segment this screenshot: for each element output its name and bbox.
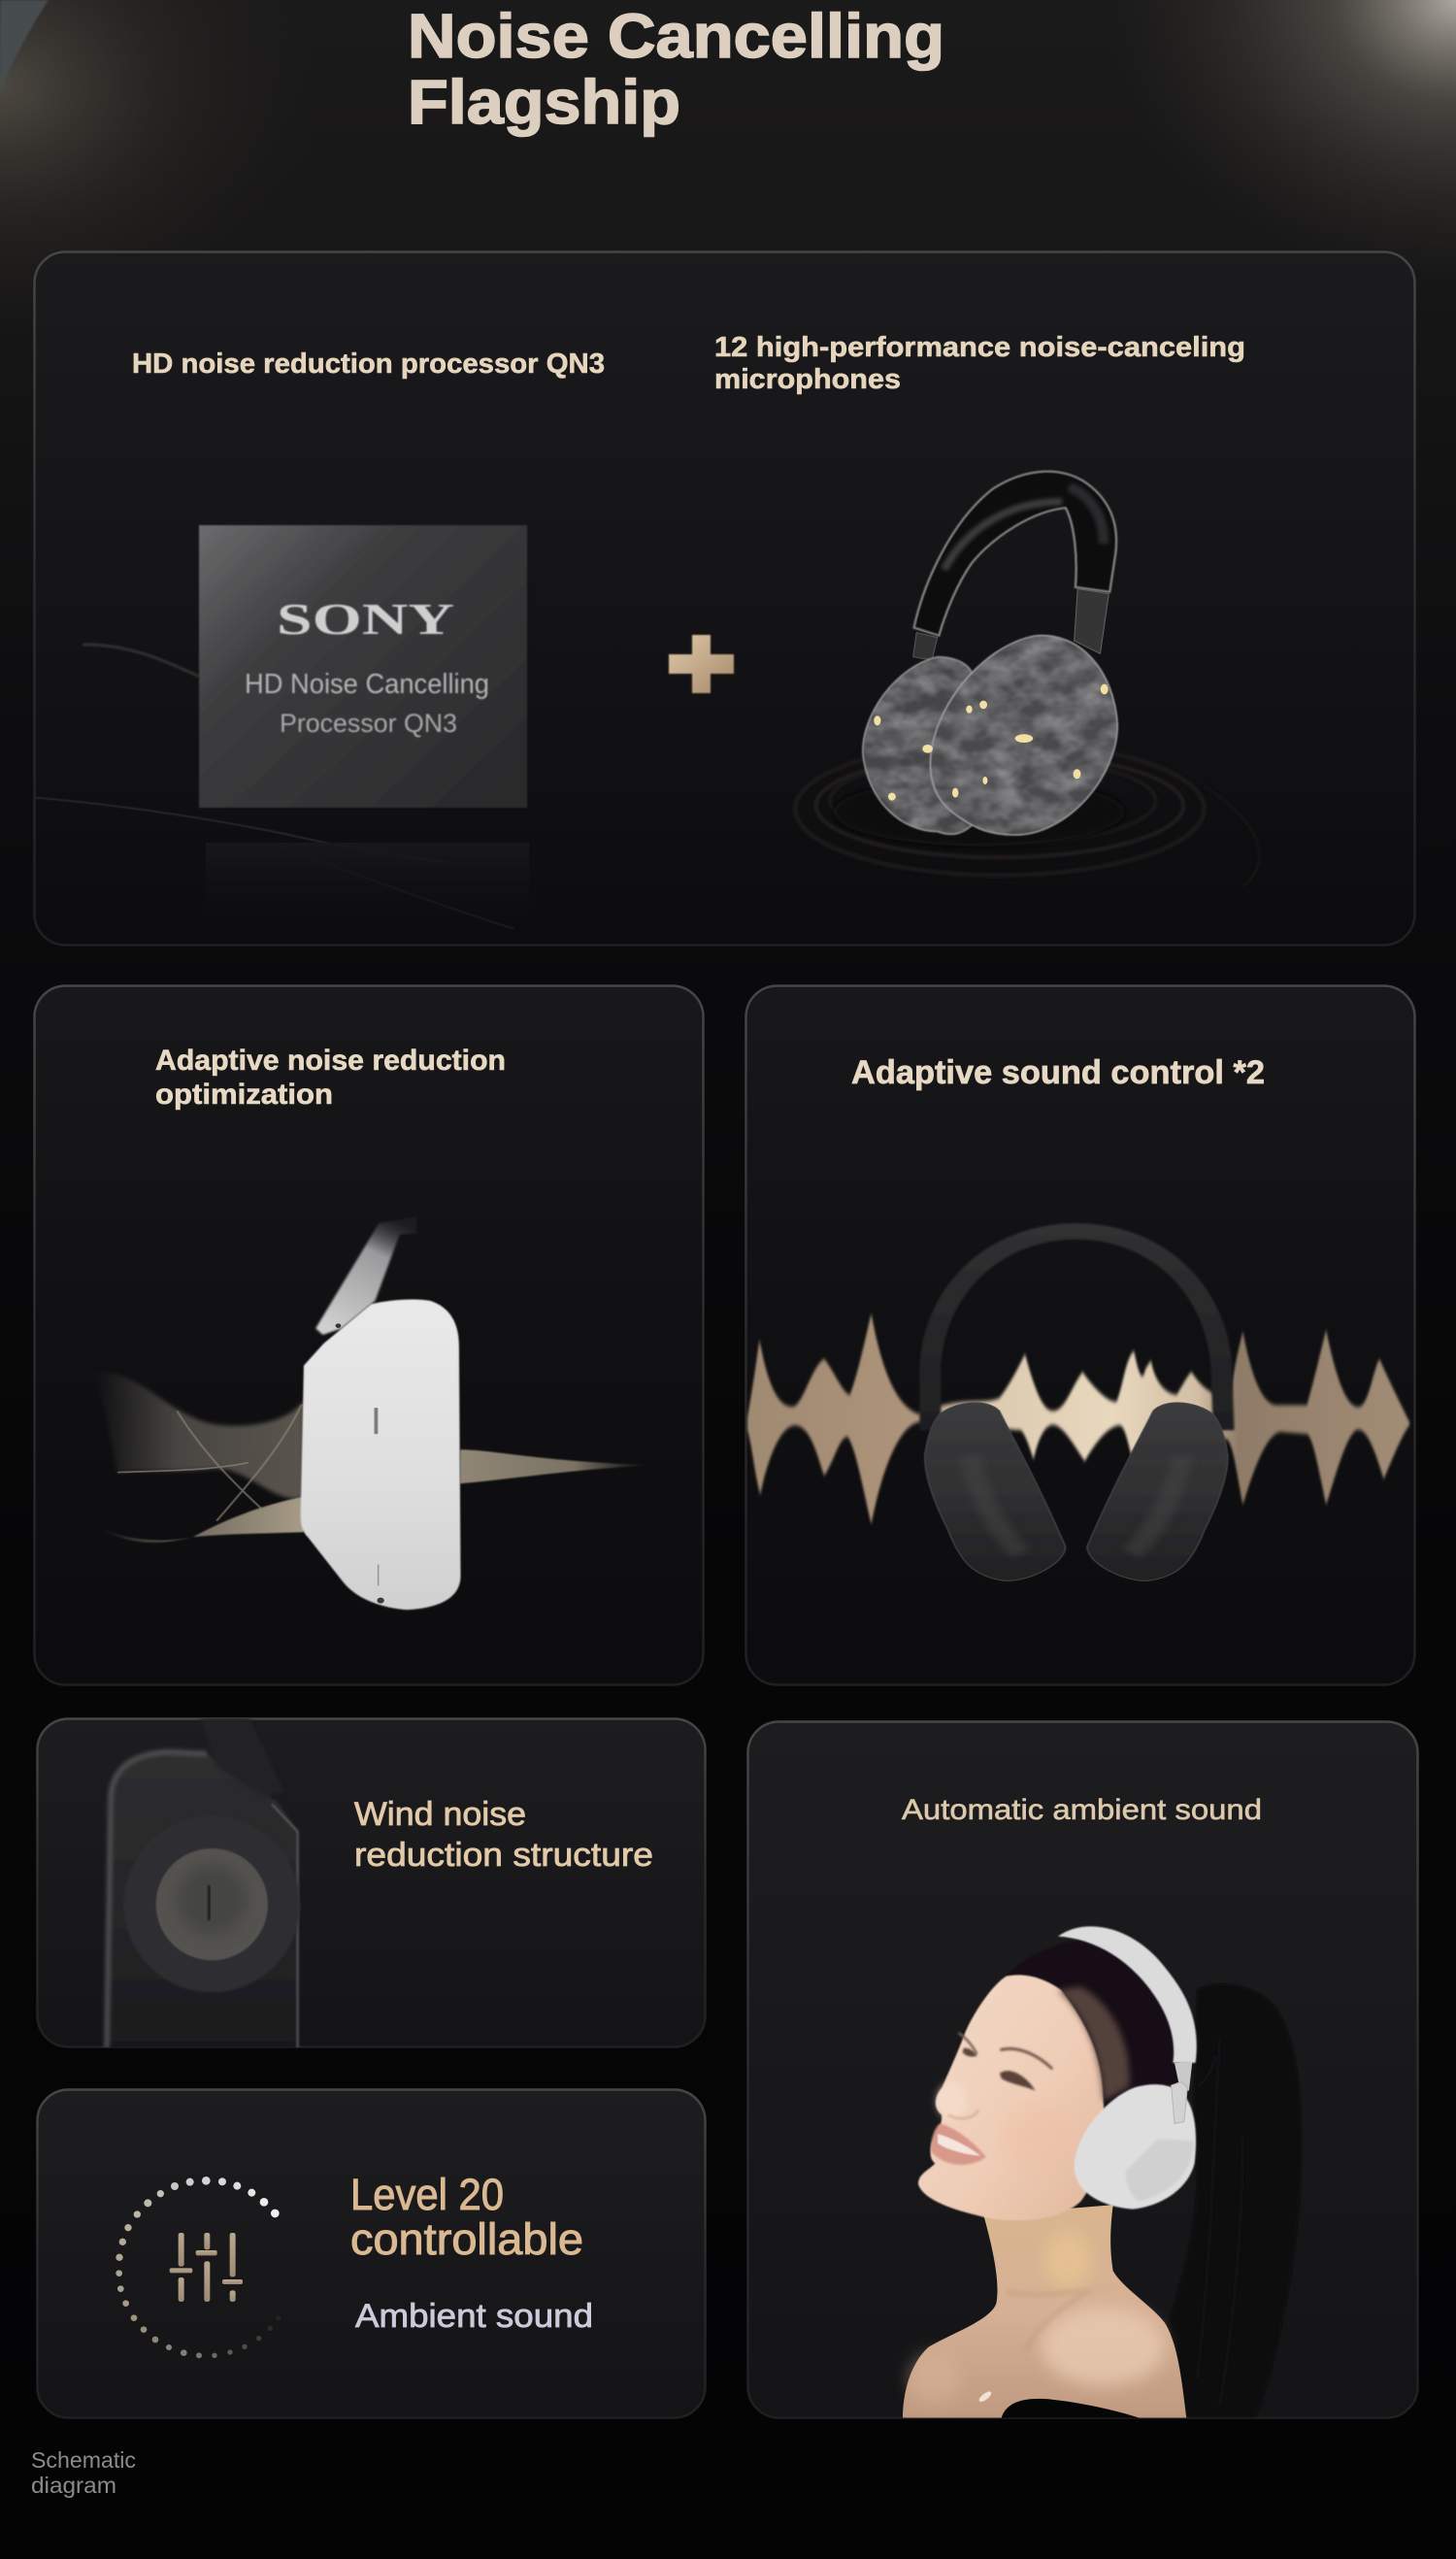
headband <box>1058 1926 1197 2063</box>
panel: automatic ambient sound <box>747 1722 1417 2417</box>
text: level 20 controllable: Level 20 <box>350 2170 504 2219</box>
title: Noise Cancelling <box>408 1 944 71</box>
icon: transparent headphones with microphones <box>795 471 1259 886</box>
hairline shading <box>1058 1986 1130 2101</box>
chart: sound waveform with headphones <box>747 1231 1410 1580</box>
face <box>918 1975 1104 2220</box>
title: Flagship <box>408 67 680 137</box>
icon: white ear cup with wisps <box>94 1216 652 1610</box>
heading: Adaptive sound control *2 <box>851 1054 1265 1091</box>
flowing lines <box>36 645 513 929</box>
icon: ear cup structure <box>107 1718 300 2048</box>
stems <box>913 633 938 660</box>
photo: woman wearing white headphones <box>903 1926 1302 2417</box>
chip: SONY <box>277 594 454 644</box>
plus sign <box>669 635 734 693</box>
chip <box>199 525 527 808</box>
chip: Processor QN3 <box>280 709 457 738</box>
left ear cup <box>925 1403 1066 1580</box>
microphone dots <box>874 684 1109 801</box>
text: wind noise: Wind noise <box>354 1796 526 1833</box>
chip reflection <box>206 843 529 940</box>
chip: HD Noise Cancelling <box>245 669 489 700</box>
panel: level 20 ambient control <box>37 2089 705 2417</box>
text: wind noise <box>354 1796 653 1874</box>
heading: Adaptive noise reduction <box>155 1045 506 1077</box>
heading <box>155 1045 506 1111</box>
footnote: diagram <box>31 2473 116 2498</box>
text: wind noise: reduction structure <box>354 1837 653 1874</box>
panel: processor and microphones <box>35 252 1415 946</box>
heading: optimization <box>155 1079 333 1111</box>
heading: processor: HD noise reduction processor QN3 <box>132 349 605 380</box>
footnote: Schematic <box>31 2447 136 2473</box>
heading: microphones: microphones <box>714 364 901 395</box>
rear cup <box>863 657 973 834</box>
headband <box>930 1231 1224 1430</box>
ponytail <box>1170 1984 1302 2417</box>
earcup <box>1075 2084 1196 2210</box>
icon: dial with sliders <box>116 2177 281 2358</box>
right ear cup <box>1087 1403 1228 1580</box>
heading: microphones: 12 high-performance noise-canceling <box>714 332 1245 363</box>
text: level 20 controllable <box>350 2170 583 2264</box>
title <box>408 1 944 137</box>
footnote <box>31 2447 136 2498</box>
hair <box>1007 1940 1181 2114</box>
heading: Automatic ambient sound <box>902 1794 1262 1826</box>
eyebrows <box>959 2034 1051 2068</box>
black top <box>1002 2399 1139 2417</box>
heading: microphones <box>714 332 1245 395</box>
panel: adaptive noise reduction <box>35 986 703 1685</box>
front cup <box>930 636 1117 835</box>
eyes <box>1000 2071 1036 2090</box>
mouth <box>931 2123 986 2165</box>
panel: adaptive sound control <box>745 986 1415 1685</box>
text: ambient sound: Ambient sound <box>355 2298 593 2335</box>
headband <box>913 471 1116 636</box>
panel: wind noise reduction <box>37 1718 705 2048</box>
neck and shoulders <box>903 2205 1186 2417</box>
text: level 20 controllable: controllable <box>350 2214 583 2264</box>
